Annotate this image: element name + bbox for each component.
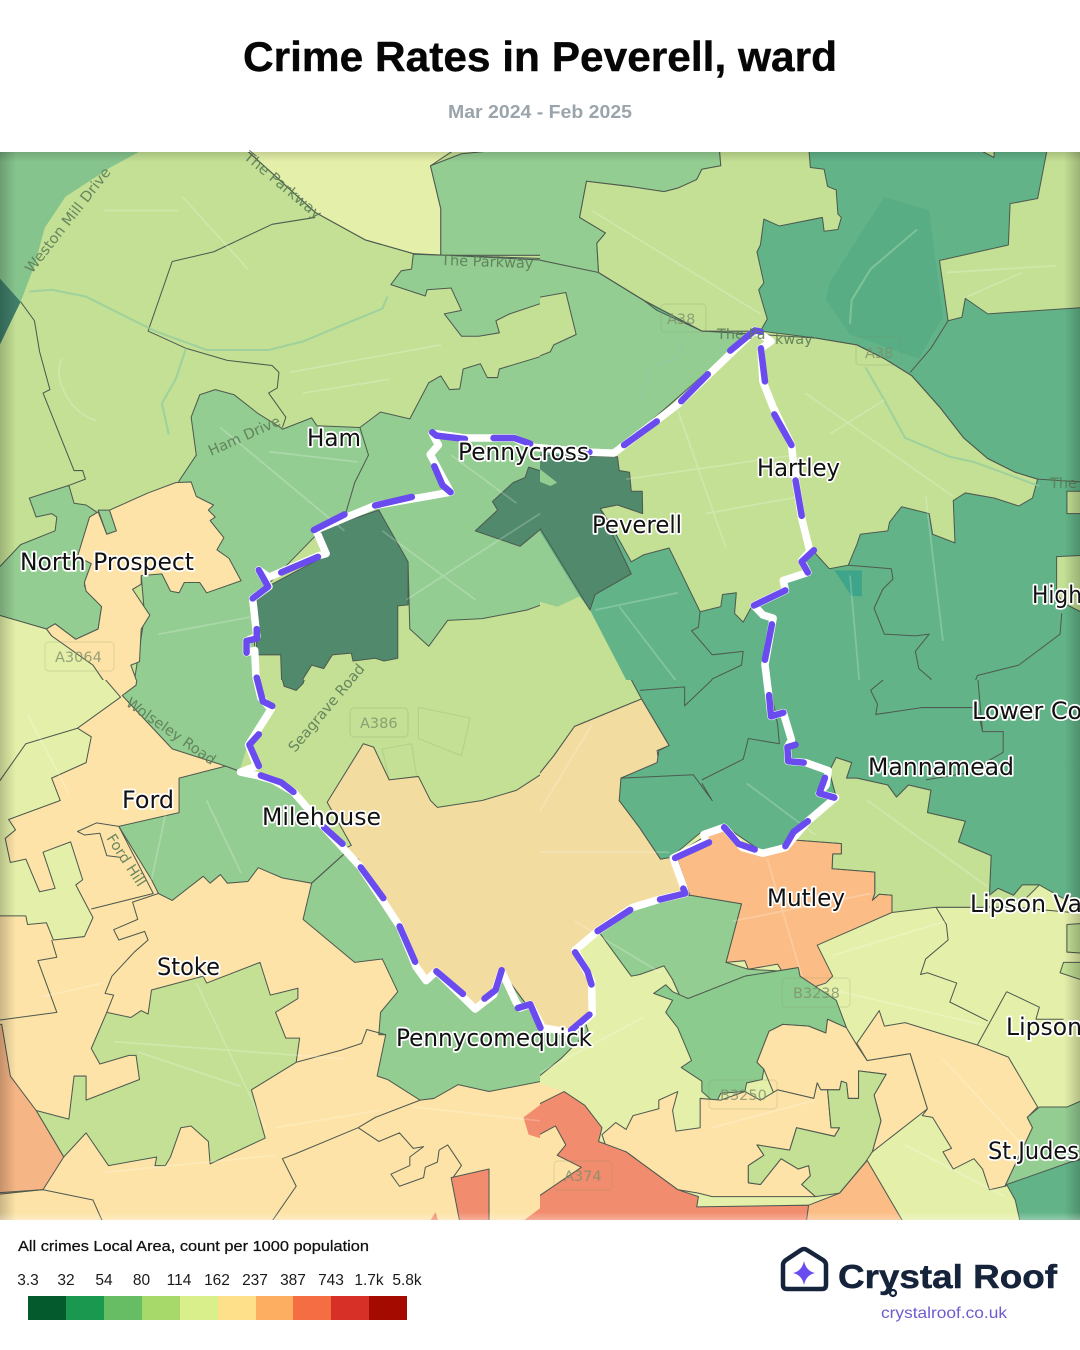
road names: Weston Mill Drive	[23, 165, 115, 276]
road names: The Pa	[716, 327, 766, 343]
road names: Seagrave Road	[286, 661, 368, 756]
map edge vignette	[0, 152, 1080, 1220]
road shields: A386	[360, 716, 398, 732]
place labels: Hartley	[757, 454, 840, 482]
legend scale values: 237	[242, 1272, 268, 1289]
ward boundary: purple dashes	[247, 330, 834, 1030]
legend scale values: 54	[95, 1272, 113, 1289]
place labels	[20, 424, 1080, 1165]
road names: The	[1049, 476, 1077, 492]
road names	[23, 148, 1077, 890]
website url: crystalroof.co.uk	[881, 1305, 1008, 1322]
legend scale values	[17, 1272, 422, 1289]
road shields: A3064	[55, 650, 102, 666]
place labels: Lower Co	[972, 697, 1080, 725]
ward boundary: white base line	[240, 330, 836, 1033]
legend scale values: 32	[57, 1272, 75, 1289]
road shields: A38	[865, 346, 893, 362]
Hartley light green region	[600, 331, 1038, 622]
road names: Wolseley Road	[123, 695, 218, 769]
legend scale values: 3.3	[17, 1272, 39, 1289]
road shields	[45, 304, 901, 1190]
legend colour bar	[28, 1296, 407, 1320]
place labels: Peverell	[592, 511, 682, 539]
legend title: All crimes Local Area, count per 1000 population	[18, 1239, 369, 1255]
road shields: B3250	[720, 1088, 767, 1104]
large tan ward area	[327, 744, 551, 1038]
legend scale values: 1.7k	[354, 1272, 384, 1289]
dark block tip	[281, 673, 307, 690]
place labels: North Prospect	[20, 548, 194, 576]
place labels: Milehouse	[262, 803, 381, 831]
road names: Ham Drive	[206, 414, 283, 460]
Pennycomequick green continuation	[533, 1021, 588, 1081]
legend scale values: 114	[167, 1272, 192, 1289]
road shields: A38	[667, 312, 695, 328]
place labels: Stoke	[157, 953, 220, 981]
place labels: Ham	[307, 424, 361, 452]
place labels: Ford	[122, 786, 174, 814]
subtitle: date range: Mar 2024 - Feb 2025	[448, 102, 632, 122]
Stoke light green region	[36, 962, 300, 1166]
place labels: Mannamead	[868, 753, 1014, 781]
legend scale values: 162	[204, 1272, 230, 1289]
place labels: Pennycross	[458, 438, 589, 466]
dark low-crime block left of ward centre	[257, 510, 408, 703]
map: bottom-left area regions	[0, 680, 540, 1220]
road names: Ford Hill	[103, 831, 148, 890]
legend	[17, 1239, 422, 1320]
map: top-left area regions	[0, 152, 540, 680]
map: bottom-right area regions	[540, 680, 1080, 1220]
map: top-right area regions	[540, 152, 1080, 680]
road names: The Parkway	[240, 148, 325, 223]
road names: kway	[775, 332, 813, 348]
legend scale values: 5.8k	[392, 1272, 422, 1289]
legend scale values: 387	[280, 1272, 306, 1289]
logo key mark	[890, 1290, 896, 1296]
legend scale values: 743	[318, 1272, 344, 1289]
road shields: B3238	[793, 986, 840, 1002]
icon: house with star	[783, 1249, 826, 1289]
road shields: A374	[564, 1169, 602, 1185]
place labels: Mutley	[767, 884, 845, 912]
dark low-crime block west of Peverell label	[475, 467, 551, 546]
legend scale values: 80	[133, 1272, 150, 1289]
Mutley orange region	[671, 830, 892, 987]
red high-crime region along A374	[533, 1092, 809, 1231]
road names: The Parkway	[440, 253, 534, 272]
title: Crime Rates in Peverell, ward	[243, 33, 837, 80]
wordmark: Crystal Roof	[838, 1258, 1058, 1295]
dark low-crime block around Peverell label	[533, 455, 643, 610]
logo: Crystal Roof	[783, 1249, 1058, 1322]
place labels: Pennycomequick	[396, 1024, 592, 1052]
